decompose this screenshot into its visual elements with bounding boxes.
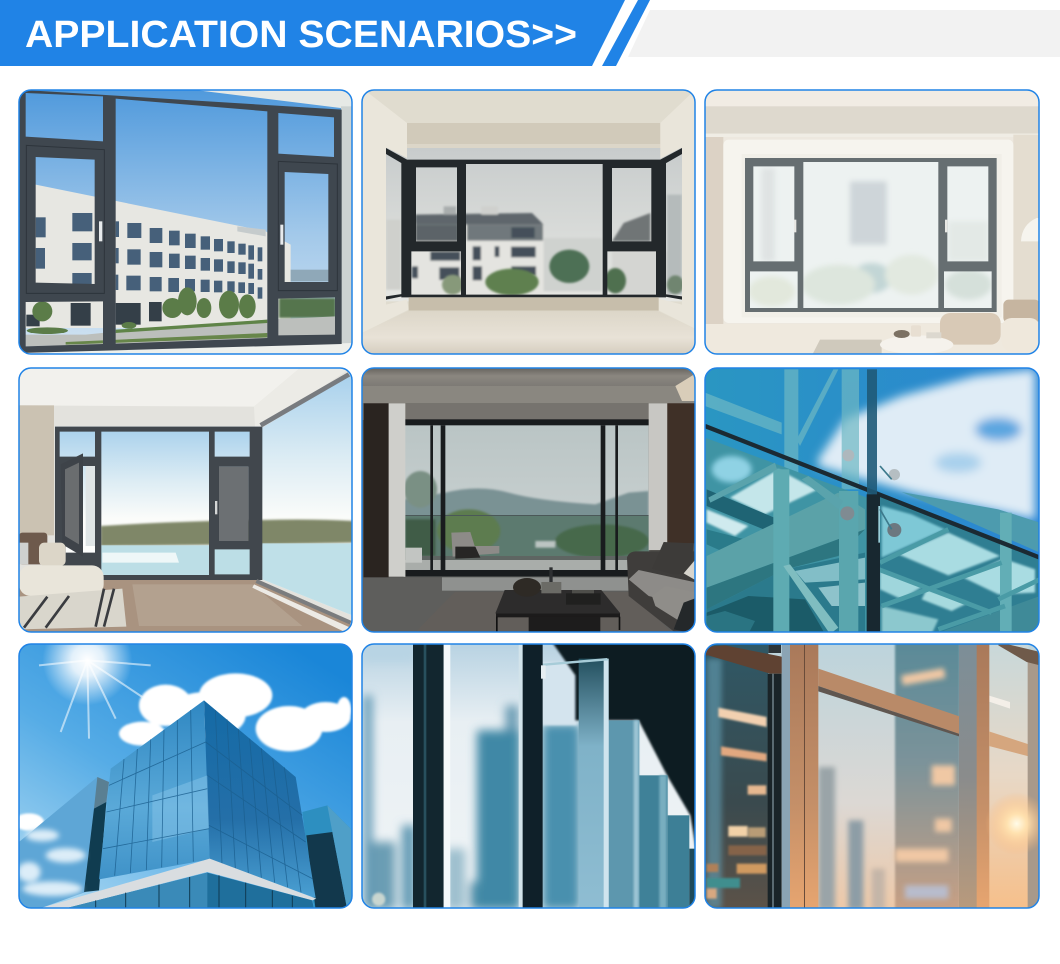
photo 7: glass office tower under sun xyxy=(20,644,352,908)
header grey strip xyxy=(628,10,1060,57)
header slanted accent xyxy=(602,0,650,66)
title: APPLICATION SCENARIOS>> xyxy=(25,14,577,56)
header banner xyxy=(0,0,1060,66)
photo 1: office building through window xyxy=(19,88,354,356)
photo 4: living room with lake view xyxy=(19,366,354,634)
photo 3: bright minimal room xyxy=(705,88,1040,356)
photo 8: blurred city through glass xyxy=(362,642,697,910)
photo 6: glass canopy with steel frame xyxy=(705,366,1040,634)
header blue band xyxy=(0,0,625,66)
photo 9: sunset city through bronze frame xyxy=(705,642,1048,910)
photo 5: dark living room with valley view xyxy=(362,366,697,634)
photo 2: bay window room xyxy=(362,88,697,356)
